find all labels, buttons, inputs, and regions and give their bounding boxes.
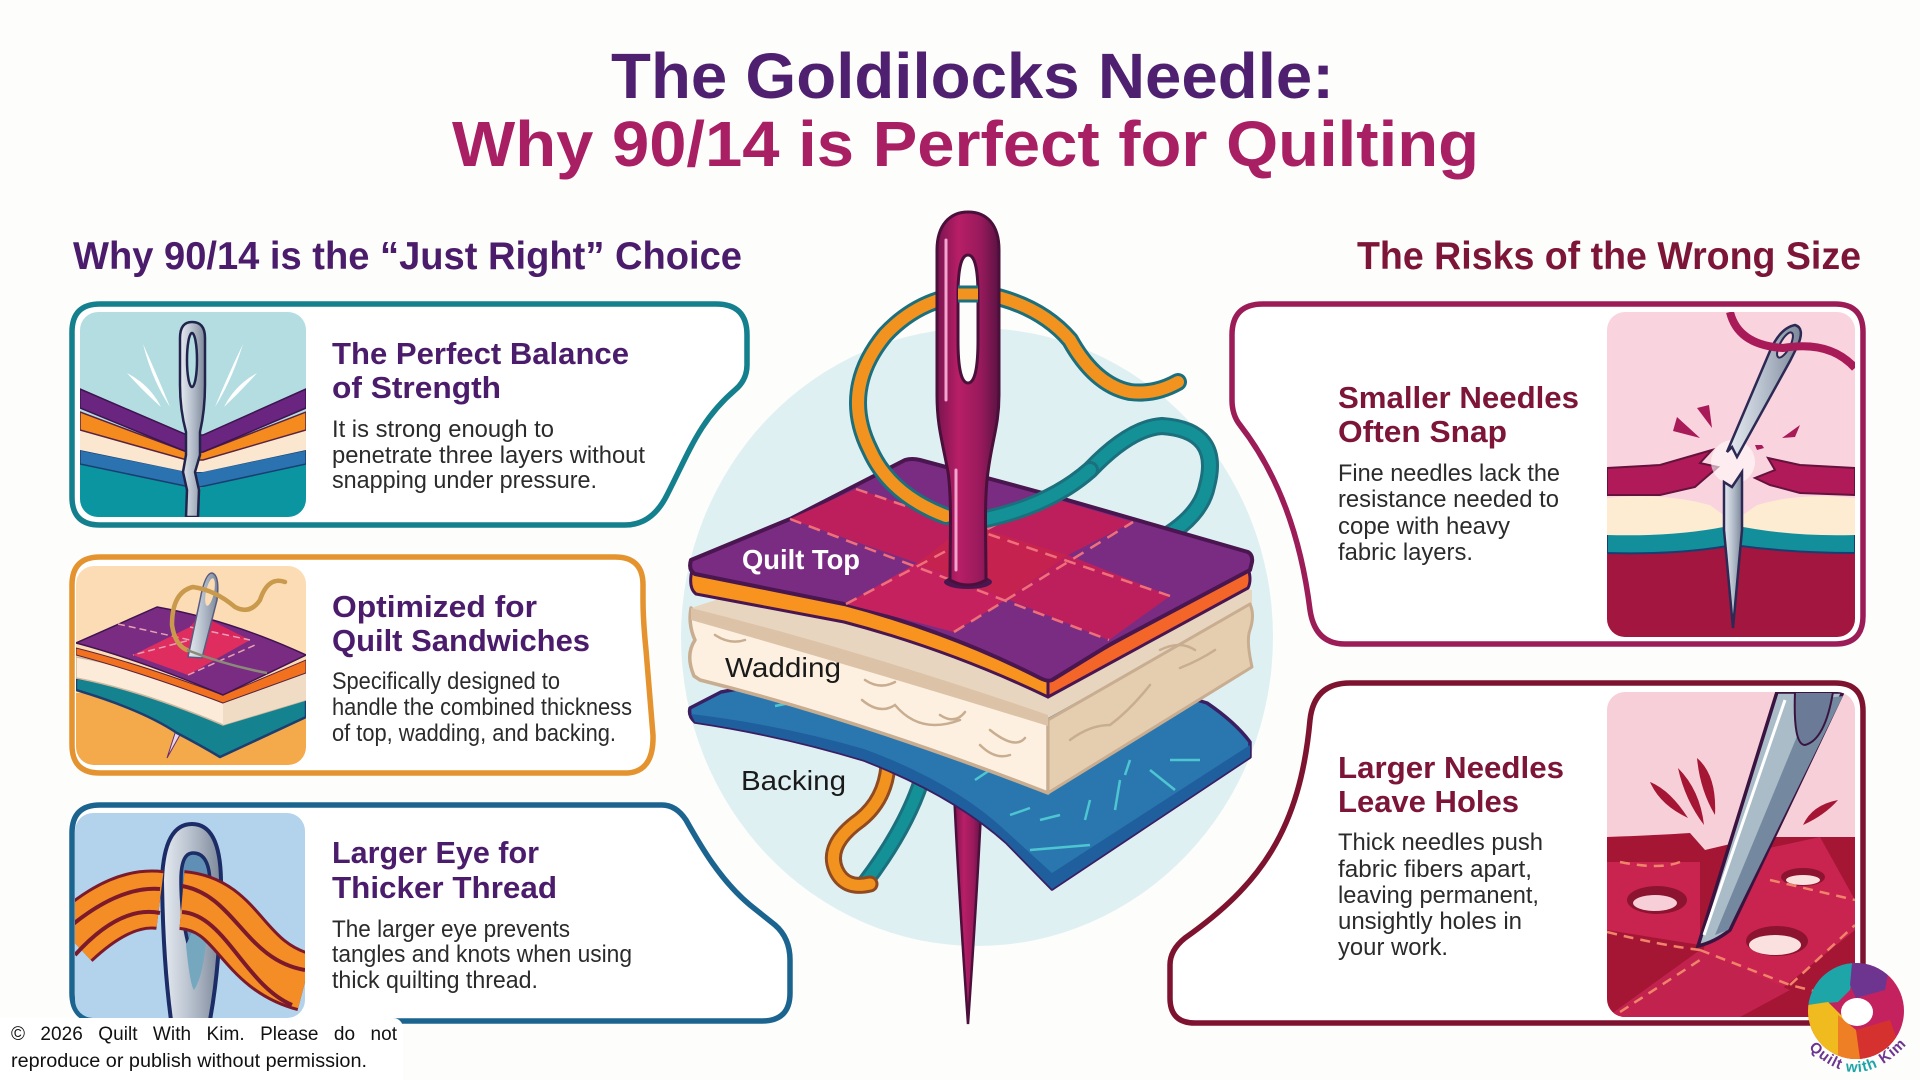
background circle bbox=[681, 328, 1273, 946]
icon: large needle pushing fabric bbox=[1607, 692, 1855, 1017]
text: larger needles: Leave Holes bbox=[1338, 784, 1519, 819]
text: perfect balance: penetrate three layers without bbox=[332, 442, 645, 469]
text: smaller needles: cope with heavy bbox=[1338, 513, 1510, 540]
icon: large needle eye with thread bbox=[72, 813, 305, 1020]
text: larger needles: fabric fibers apart, bbox=[1338, 856, 1532, 883]
wadding layer bbox=[690, 540, 1252, 793]
text: smaller needles: Often Snap bbox=[1338, 414, 1507, 449]
text: larger eye: tangles and knots when using bbox=[332, 941, 632, 968]
icon: snapped needle bbox=[1607, 312, 1855, 637]
text: larger eye: The larger eye prevents bbox=[332, 916, 570, 943]
text: larger eye: Larger Eye for bbox=[332, 835, 539, 870]
text: quilt sandwiches: of top, wadding, and backing. bbox=[332, 720, 616, 747]
text: larger needles: your work. bbox=[1338, 934, 1448, 961]
text: perfect balance: snapping under pressure. bbox=[332, 467, 597, 494]
copyright notice: © 2026 Quilt With Kim. Please do not bbox=[11, 1024, 398, 1045]
text: perfect balance bbox=[332, 336, 645, 494]
lower threads bbox=[833, 766, 921, 885]
text: smaller needles: Fine needles lack the bbox=[1338, 460, 1560, 487]
text: smaller needles: resistance needed to bbox=[1338, 486, 1559, 513]
title: The Goldilocks Needle: bbox=[611, 40, 1334, 112]
label: backing: Backing bbox=[741, 765, 846, 796]
panel: smaller needles often snap bbox=[1232, 304, 1863, 644]
text: larger eye: Thicker Thread bbox=[332, 870, 557, 905]
text: larger needles: leaving permanent, bbox=[1338, 882, 1539, 909]
text: larger eye bbox=[332, 835, 632, 994]
text: perfect balance: of Strength bbox=[332, 370, 501, 405]
label: quilt top: Quilt Top bbox=[742, 544, 860, 575]
label: wadding: Wadding bbox=[725, 652, 841, 683]
text: perfect balance: It is strong enough to bbox=[332, 416, 554, 443]
heading: why 90/14 is right: Why 90/14 is the “Just Right” Choice bbox=[73, 235, 742, 278]
panel: perfect balance of strength bbox=[72, 304, 747, 525]
text: larger needles: Larger Needles bbox=[1338, 750, 1564, 785]
text: quilt sandwiches: Optimized for bbox=[332, 589, 537, 624]
text: smaller needles: fabric layers. bbox=[1338, 539, 1473, 566]
text: larger eye: thick quilting thread. bbox=[332, 967, 538, 994]
orange lining layer bbox=[691, 568, 1250, 697]
title: Why 90/14 is Perfect for Quilting bbox=[452, 108, 1479, 180]
logo: quilt with kim: Quilt with Kim bbox=[1810, 1040, 1906, 1072]
panel: larger eye for thicker thread bbox=[72, 805, 790, 1021]
text: quilt sandwiches: Specifically designed to bbox=[332, 668, 560, 695]
logo: quilt with kim bbox=[1808, 963, 1906, 1072]
text: quilt sandwiches: Quilt Sandwiches bbox=[332, 623, 590, 658]
text: larger needles: Thick needles push bbox=[1338, 829, 1543, 856]
text: quilt sandwiches bbox=[332, 589, 632, 747]
panel: larger needles leave holes bbox=[1170, 683, 1863, 1023]
copyright notice: reproduce or publish without permission. bbox=[11, 1051, 367, 1072]
teal thread tail behind quilt bbox=[986, 426, 1210, 545]
panel: optimized for quilt sandwiches bbox=[72, 557, 653, 773]
copyright notice bbox=[0, 1018, 403, 1080]
backing layer bbox=[690, 640, 1250, 889]
icon: needle through layers bbox=[80, 312, 306, 517]
heading: risks of the wrong size: The Risks of the Wrong Size bbox=[1357, 235, 1861, 278]
thread orange through eye bbox=[858, 294, 1178, 516]
illustration: needle through quilt sandwich bbox=[681, 212, 1273, 1024]
lower needle tip bbox=[954, 790, 982, 1024]
text: larger needles bbox=[1338, 750, 1564, 961]
text: quilt sandwiches: handle the combined thickness bbox=[332, 694, 632, 721]
text: smaller needles: Smaller Needles bbox=[1338, 380, 1579, 415]
text: smaller needles bbox=[1338, 380, 1579, 566]
quilt top patchwork bbox=[690, 459, 1252, 681]
thread teal over quilt top bbox=[986, 470, 1090, 519]
icon: mini quilt sandwich bbox=[76, 566, 306, 766]
text: perfect balance: The Perfect Balance bbox=[332, 336, 629, 371]
main needle bbox=[937, 212, 999, 589]
text: larger needles: unsightly holes in bbox=[1338, 908, 1522, 935]
title bbox=[452, 40, 1479, 180]
